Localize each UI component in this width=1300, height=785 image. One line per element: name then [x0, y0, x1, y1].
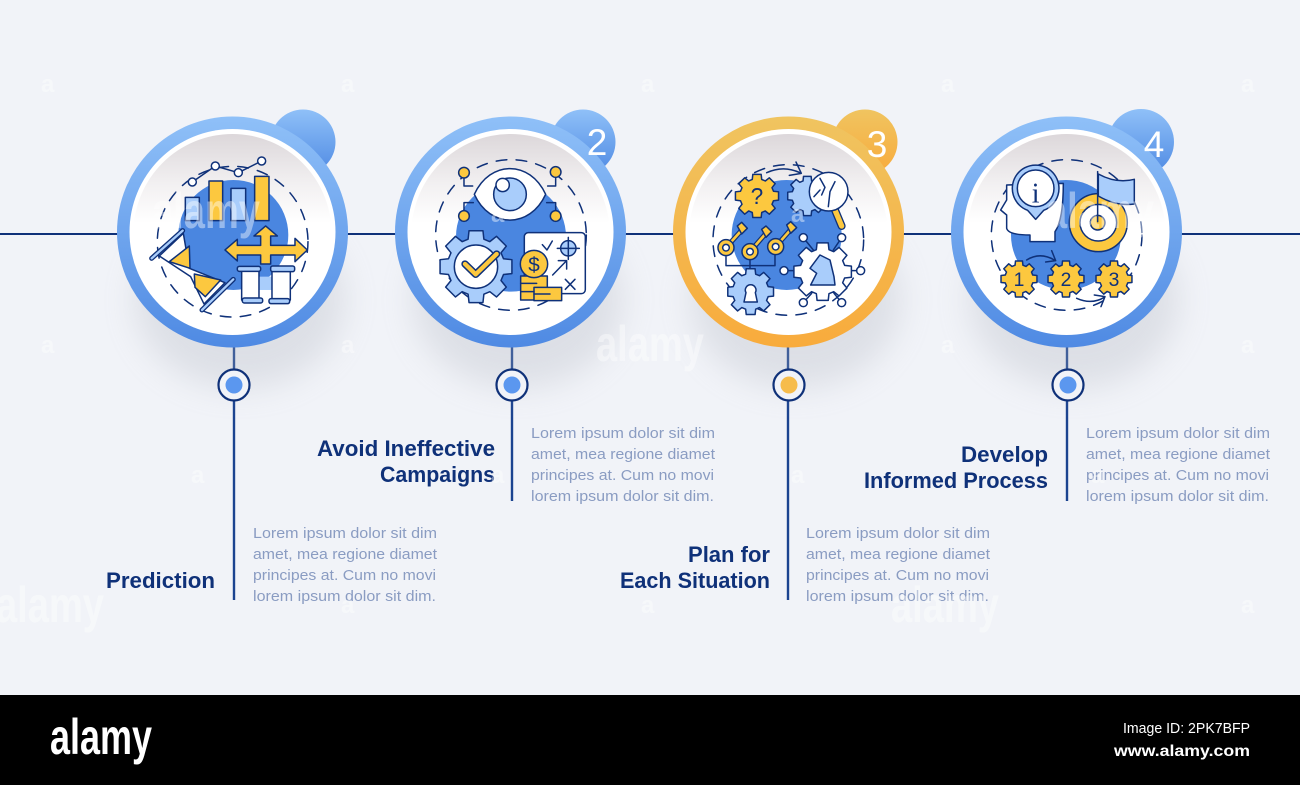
text block: step 2: principes at. Cum no movi: [531, 467, 714, 484]
text block: step 1: amet, mea regione diamet: [253, 546, 438, 563]
footer background: [0, 695, 1300, 785]
text block: step 3: amet, mea regione diamet: [806, 546, 991, 563]
step 3 number: 3: [867, 124, 887, 165]
heading: Develop Informed Process: Develop: [961, 442, 1048, 467]
step 1 badge: [270, 110, 336, 174]
watermarks: a: [1091, 462, 1105, 489]
watermarks: alamy: [596, 316, 704, 372]
heading: Avoid Ineffective Campaigns: Campaigns: [380, 462, 495, 487]
heading: Prediction: Prediction: [106, 568, 215, 593]
watermarks: [0, 71, 1255, 633]
icon: head with info pin, target flag and numbered gears: [991, 160, 1142, 310]
timeline nodes: [218, 370, 1084, 400]
text block: step 2: [531, 425, 716, 505]
text block: step 3: principes at. Cum no movi: [806, 567, 989, 584]
icon: head with info pin, target flag and numbered gears: i: [1032, 178, 1040, 209]
watermarks: a: [41, 71, 55, 98]
step 3 white disc: [686, 129, 892, 335]
step 4 number: 4: [1144, 124, 1164, 165]
text block: step 1: lorem ipsum dolor sit dim.: [253, 588, 436, 605]
step 4 badge: [1108, 109, 1174, 175]
heading: Plan for Each Situation: Plan for: [688, 542, 770, 567]
watermarks: a: [341, 592, 355, 619]
watermarks: a: [1241, 332, 1255, 359]
icon: gears, keys, magnifier and chess knight: ?: [751, 183, 763, 209]
step 3 ring: [673, 116, 904, 348]
text block: step 2: lorem ipsum dolor sit dim.: [531, 488, 714, 505]
icon: eye, gear, coins and strategy board: $: [528, 254, 540, 277]
step 3 inner shade: [690, 134, 888, 332]
watermarks: alamy: [152, 183, 260, 239]
step 2 ring: [395, 116, 626, 348]
icon: gears, keys, magnifier and chess knight: [713, 162, 865, 315]
text block: step 4: [1086, 425, 1271, 505]
footer band: [0, 695, 1300, 785]
watermarks: a: [41, 332, 55, 359]
text block: step 3: [806, 525, 991, 605]
text block: step 1: [253, 525, 438, 605]
text block: step 3: lorem ipsum dolor sit dim.: [806, 588, 989, 605]
text block: step 4: principes at. Cum no movi: [1086, 467, 1269, 484]
panel: step 3 Plan for Each Situation: [673, 110, 904, 348]
panel: step 1 Prediction: [117, 110, 348, 348]
step 4 inner shade: [968, 134, 1166, 332]
heading: Avoid Ineffective Campaigns: [317, 436, 495, 487]
heading: Plan for Each Situation: Each Situation: [620, 568, 770, 593]
watermarks: a: [1241, 71, 1255, 98]
step 1 inner shade: [134, 134, 332, 332]
watermarks: a: [1241, 592, 1255, 619]
watermarks: a: [791, 462, 805, 489]
watermarks: a: [191, 462, 205, 489]
step 2 badge: [550, 110, 616, 174]
watermarks: a: [341, 71, 355, 98]
icon: head with info pin, target flag and numbered gears: 2: [1061, 270, 1071, 291]
footer logo: alamy: [50, 709, 152, 765]
watermarks: a: [791, 201, 805, 228]
icon: eye, gear, coins and strategy board: [436, 160, 586, 310]
watermarks: a: [491, 462, 505, 489]
watermarks: a: [341, 332, 355, 359]
step 3 badge: [832, 110, 898, 174]
icon: head with info pin, target flag and numbered gears: 1: [1014, 270, 1024, 291]
icon: head with info pin, target flag and numbered gears: 3: [1109, 270, 1119, 291]
step 4 white disc: [964, 129, 1170, 335]
step 2 number: 2: [587, 122, 607, 163]
text block: step 4: Lorem ipsum dolor sit dim: [1086, 425, 1270, 442]
heading: Avoid Ineffective Campaigns: Avoid Ineffective: [317, 436, 495, 461]
step 2 inner shade: [412, 134, 610, 332]
watermarks: a: [491, 201, 505, 228]
watermarks: a: [941, 332, 955, 359]
panel: step 4 Develop Informed Process: [951, 109, 1182, 348]
step 1 ring: [117, 116, 348, 348]
footer url: www.alamy.com: [1113, 743, 1250, 760]
text block: step 2: Lorem ipsum dolor sit dim: [531, 425, 715, 442]
watermarks: a: [641, 592, 655, 619]
watermarks: alamy: [891, 577, 999, 633]
step 1 white disc: [130, 129, 336, 335]
horizontal timeline: [0, 233, 1300, 235]
watermarks: alamy: [0, 577, 104, 633]
step 2 white disc: [408, 129, 614, 335]
watermarks: a: [641, 71, 655, 98]
text block: step 1: principes at. Cum no movi: [253, 567, 436, 584]
circle shadows: [135, 212, 1179, 388]
footer image id: Image ID: 2PK7BFP: [1123, 720, 1250, 737]
text block: step 2: amet, mea regione diamet: [531, 446, 716, 463]
text block: step 3: Lorem ipsum dolor sit dim: [806, 525, 990, 542]
text block: step 4: lorem ipsum dolor sit dim.: [1086, 488, 1269, 505]
step 4 ring: [951, 116, 1182, 348]
text block: step 1: Lorem ipsum dolor sit dim: [253, 525, 437, 542]
watermarks: alamy: [1046, 183, 1154, 239]
heading: Plan for Each Situation: [620, 542, 770, 593]
vertical connectors: [234, 345, 1067, 600]
heading: Develop Informed Process: [864, 442, 1048, 493]
panel: step 2 Avoid Ineffective Campaigns: [395, 110, 626, 348]
icon: forecast chart, hourglass and arrows: [152, 157, 308, 317]
text block: step 4: amet, mea regione diamet: [1086, 446, 1271, 463]
heading: Develop Informed Process: Informed Process: [864, 468, 1048, 493]
watermarks: a: [941, 71, 955, 98]
